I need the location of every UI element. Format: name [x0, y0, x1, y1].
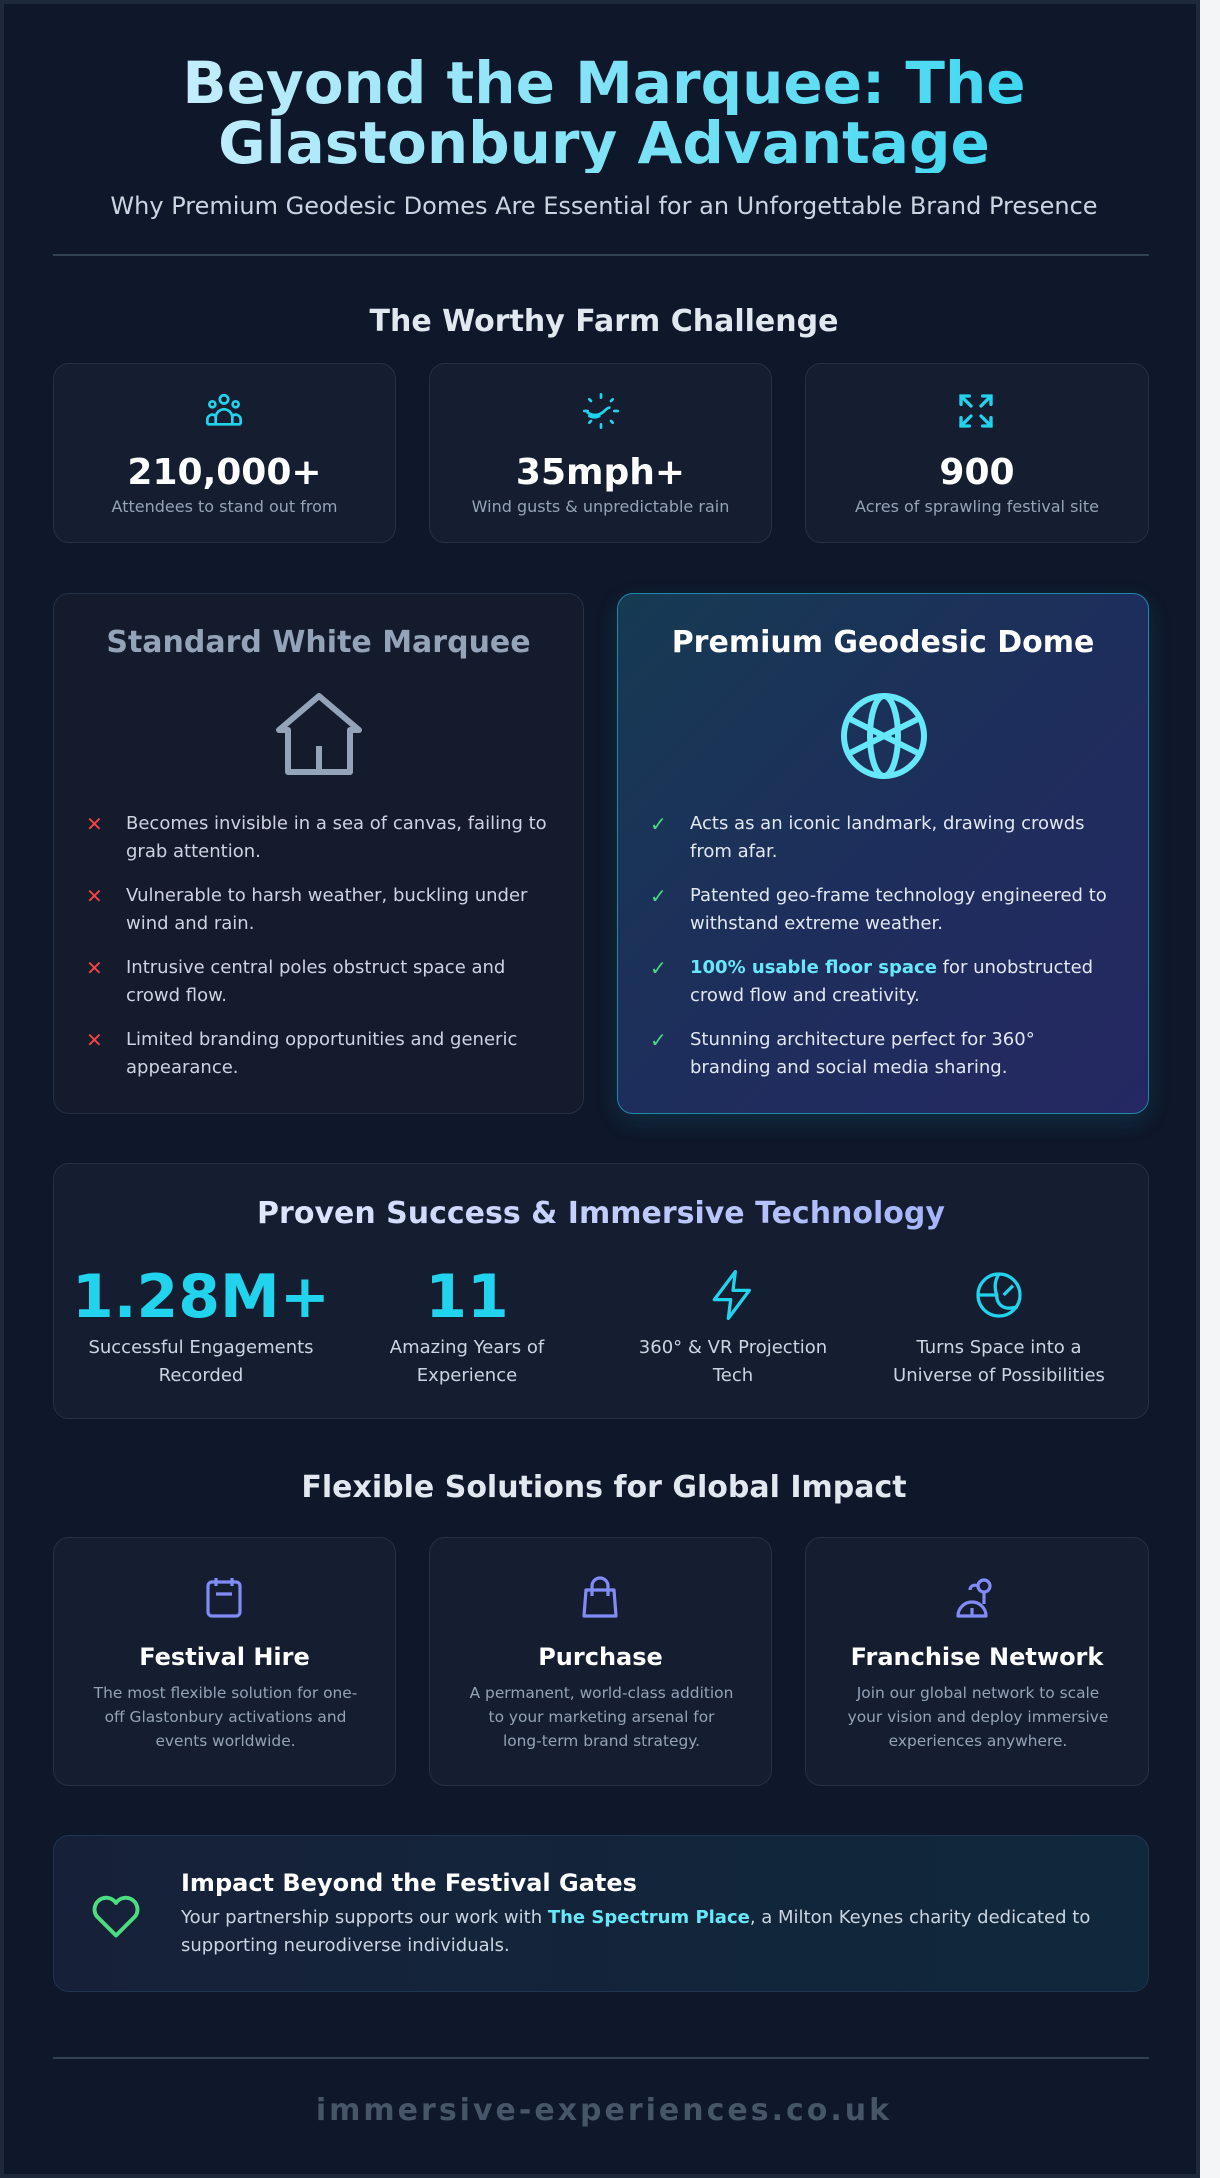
card: purchase: Purchase [538, 1643, 663, 1671]
stat: years: Amazing Years of [390, 1337, 544, 1358]
card: franchise [805, 1537, 1149, 1786]
icon: calendar [206, 1578, 242, 1618]
list: drawbacks: ✕ [86, 812, 103, 836]
stat: engagements: 1.28M+ [72, 1262, 330, 1332]
panel: proven success [53, 1163, 1149, 1419]
card: acres [805, 363, 1149, 543]
icon: bag [582, 1576, 618, 1618]
panel: geodesic dome [617, 593, 1149, 1114]
card: franchise: Franchise Network [851, 1643, 1103, 1671]
heading: challenge: The Worthy Farm Challenge [370, 304, 838, 339]
stat: projection: 360° & VR Projection [639, 1337, 827, 1358]
icon: house [276, 692, 362, 775]
title [4, 53, 1204, 173]
stat: years: 11 [425, 1262, 509, 1332]
title: Glastonbury Advantage [218, 109, 990, 177]
card: attendees [53, 363, 396, 543]
stat: universe [893, 1272, 1105, 1386]
stat: years: Experience [417, 1365, 517, 1386]
stat: years [390, 1262, 545, 1386]
callout: impact: Impact Beyond the Festival Gates [181, 1869, 637, 1897]
stat: projection: Tech [713, 1365, 753, 1386]
card: festival hire: The most flexible solution for one-off Glastonbury activations and events worldwide. [94, 1684, 357, 1750]
card: purchase [429, 1537, 772, 1786]
list: drawbacks: ✕ [86, 1028, 103, 1052]
list: benefits: Stunning architecture perfect for 360° branding and social media sharing. [690, 1029, 1035, 1078]
list: benefits [650, 812, 1107, 1078]
list: drawbacks: ✕ [86, 884, 103, 908]
card: attendees: Attendees to stand out from [112, 497, 337, 516]
list: drawbacks: Limited branding opportunities and generic appearance. [126, 1029, 517, 1078]
list: drawbacks: Intrusive central poles obstruct space and crowd flow. [126, 957, 505, 1006]
list: benefits: 100% usable floor space for unobstructed crowd flow and creativity. [690, 957, 1093, 1006]
subtitle: Why Premium Geodesic Domes Are Essential for an Unforgettable Brand Presence [110, 192, 1098, 220]
list: benefits: ✓ [650, 1028, 667, 1052]
stat: universe: Turns Space into a [916, 1337, 1082, 1358]
icon: network [956, 1578, 992, 1618]
heading: marquee: Standard White Marquee [106, 625, 531, 660]
list: benefits: ✓ [650, 884, 667, 908]
card: wind: 35mph+ [516, 452, 685, 493]
card: wind [429, 363, 772, 543]
card: acres: Acres of sprawling festival site [855, 497, 1099, 516]
icon: expand [959, 394, 993, 428]
list: drawbacks: Vulnerable to harsh weather, buckling under wind and rain. [126, 885, 527, 934]
card: festival hire [53, 1537, 396, 1786]
icon: globe [841, 693, 927, 779]
stat: projection [639, 1270, 827, 1386]
list: benefits: Patented geo-frame technology engineered to withstand extreme weather. [690, 885, 1107, 934]
footer: immersive-experiences.co.uk [316, 2093, 892, 2128]
callout: impact: Your partnership supports our work with The Spectrum Place, a Milton Keynes charity dedicated to supporting neurodiverse individuals. [181, 1907, 1090, 1956]
card: franchise: Join our global network to scale your vision and deploy immersive experiences anywhere. [848, 1684, 1108, 1750]
icon: people [206, 394, 242, 426]
card: purchase: A permanent, world-class addition to your marketing arsenal for long-term brand strategy. [470, 1684, 733, 1750]
stat: engagements: Successful Engagements [88, 1337, 314, 1358]
list: drawbacks: Becomes invisible in a sea of canvas, failing to grab attention. [126, 813, 547, 862]
stat: engagements [72, 1262, 330, 1386]
list: drawbacks [86, 812, 547, 1078]
card: acres: 900 [939, 452, 1015, 493]
heading: proven: Proven Success & Immersive Technology [257, 1196, 945, 1231]
list: benefits: Acts as an iconic landmark, drawing crowds from afar. [690, 813, 1085, 862]
card: attendees: 210,000+ [127, 452, 322, 493]
icon: heart [92, 1896, 140, 1938]
stat: engagements: Recorded [159, 1365, 243, 1386]
list: benefits: ✓ [650, 956, 667, 980]
card: festival hire: Festival Hire [139, 1643, 310, 1671]
heading: flexible solutions: Flexible Solutions for Global Impact [301, 1470, 907, 1505]
list: benefits: ✓ [650, 812, 667, 836]
title: Beyond the Marquee: The [182, 49, 1026, 117]
callout: impact [53, 1835, 1149, 1992]
panel: standard marquee [53, 593, 584, 1114]
card: wind: Wind gusts & unpredictable rain [472, 497, 729, 516]
heading: dome: Premium Geodesic Dome [672, 625, 1094, 660]
stat: universe: Universe of Possibilities [893, 1365, 1105, 1386]
icon: wind [583, 393, 619, 429]
list: drawbacks: ✕ [86, 956, 103, 980]
